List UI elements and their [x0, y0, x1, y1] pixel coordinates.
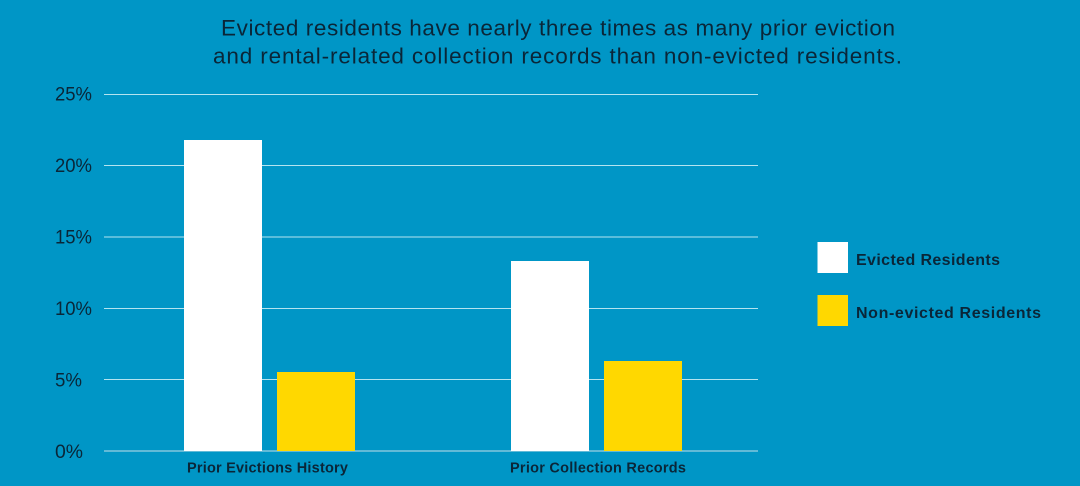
- title: and rental-related collection records than non-evicted residents.: [213, 44, 902, 68]
- bars: prior evictions history: [184, 140, 355, 451]
- bar chart: [55, 84, 758, 476]
- y axis labels: 0%: [55, 442, 83, 463]
- y axis labels: 5%: [55, 370, 82, 392]
- y axis labels: 10%: [55, 299, 92, 320]
- x axis labels: Prior Evictions History: [187, 460, 348, 476]
- x axis labels: [187, 460, 686, 476]
- title: [213, 16, 902, 68]
- bars: prior collection records: [511, 261, 682, 451]
- legend item: evicted residents: [818, 242, 1000, 273]
- legend item: non-evicted residents: [818, 295, 1041, 326]
- legend item: evicted residents: Evicted Residents: [856, 252, 1000, 269]
- y axis labels: 25%: [55, 84, 92, 106]
- legend: [818, 242, 1041, 326]
- x axis labels: Prior Collection Records: [510, 460, 686, 476]
- y axis labels: 20%: [55, 156, 92, 177]
- y axis labels: 15%: [55, 228, 92, 248]
- y axis labels: [55, 84, 92, 463]
- legend item: non-evicted residents: Non-evicted Residents: [856, 305, 1041, 322]
- title: Evicted residents have nearly three times as many prior eviction: [221, 16, 895, 40]
